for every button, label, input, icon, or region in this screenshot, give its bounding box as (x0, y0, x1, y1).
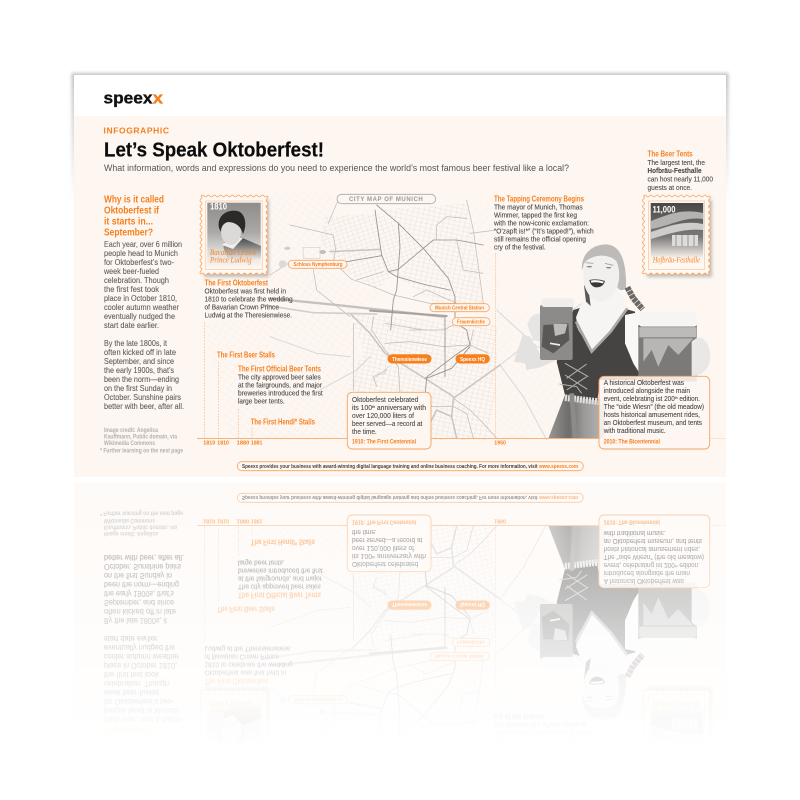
left column body: cooler autumn weather (104, 302, 179, 312)
timeline (197, 253, 726, 446)
map label: Frauenkirche: Frauenkirche (457, 320, 485, 326)
map label: Schloss Nymphenburg (288, 260, 347, 268)
timeline years: 1950 (494, 440, 506, 446)
left column body: the first fest took (104, 284, 160, 294)
braid (627, 287, 643, 309)
callout box: The First Centennial: th (372, 404, 375, 409)
callout: The Beer Tents: Hofbräu-Festhalle (648, 166, 702, 175)
right hand (692, 338, 710, 376)
map label: Theresienwiese (388, 355, 431, 363)
callout: The First Oktoberfest: 1810 to celebrate the wedding (204, 294, 293, 303)
callout box: The Bicentennial: an Oktoberfest museum, and tents (604, 418, 702, 427)
callout box: The First Centennial: anniversary with (375, 403, 426, 412)
belt (565, 398, 607, 403)
callout: The First Oktoberfest: The First Oktoberfest (204, 278, 268, 287)
callout: The Tapping Ceremony Begins: The mayor of Munich, Thomas (494, 203, 583, 212)
callout: The Tapping Ceremony Begins (493, 195, 594, 252)
left sleeve (514, 335, 557, 370)
left column heading: it starts in... (104, 216, 153, 228)
portrait (219, 211, 261, 267)
left column heading: Oktoberfest if (104, 205, 159, 217)
callout: The First Official Beer Tents (238, 365, 323, 406)
title: Let’s Speak Oktoberfest! (104, 140, 324, 162)
callout box: The First Centennial: beer served—a record at (352, 419, 423, 428)
callout box: The Bicentennial: 2010: The Bicentennial (604, 440, 660, 446)
left column body: start date earlier. (104, 320, 159, 330)
callout box: The Bicentennial: with traditional music. (603, 426, 666, 435)
map label: Schloss Nymphenburg: Schloss Nymphenburg (294, 262, 342, 268)
page shadow (72, 73, 728, 203)
eyebrow: INFOGRAPHIC (104, 126, 169, 136)
callout: The Tapping Ceremony Begins: Wimmer, tapped the first keg (494, 211, 577, 220)
skirt (548, 395, 607, 438)
footer note: www.speexx.com (538, 464, 578, 470)
stamp: Bavarian Crown Prince Ludwig: 1810 (210, 202, 227, 212)
callout: The Tapping Ceremony Begins: with the now-iconic exclamation: (493, 219, 589, 228)
left column body: people head to Munich (104, 248, 178, 258)
timeline years: 1810 (217, 440, 229, 446)
left column body: for Oktoberfest’s two- (104, 257, 174, 267)
callout: The Beer Tents (648, 150, 713, 192)
callout: The Beer Tents: can host nearly 11,000 (648, 175, 713, 184)
stamp: Hofbräu-Festhalle (642, 195, 712, 277)
callout: The Tapping Ceremony Begins: cry of the festival. (494, 243, 546, 252)
callout: The First Oktoberfest: Ludwig at the Theresienwiese. (204, 310, 292, 319)
image credit (100, 428, 184, 454)
left column heading: Why is it called (104, 194, 164, 206)
image credit: * Further learning on the next page (100, 448, 184, 454)
image credit: Kauffmann, Public domain, via (104, 434, 178, 440)
timeline years: 1881 (251, 440, 262, 446)
left column body: the early 1900s, that’s (104, 365, 174, 375)
callout box: The First Centennial: its 100 (352, 403, 374, 412)
mirrored reflection of the page (100, 492, 726, 728)
callout: The First Beer Stalls: The First Beer Stalls (217, 351, 275, 360)
left column body: been the norm—ending (104, 374, 179, 384)
left column body: often kicked off in late (104, 347, 176, 357)
callout box: The Bicentennial: edition. (678, 394, 700, 403)
stamp: Bavarian Crown Prince Ludwig: Prince Ludwig (209, 256, 252, 265)
map label: Munich Central Station (430, 304, 489, 312)
callout: The Beer Tents: The largest tent, the (648, 158, 705, 167)
callout box: The First Centennial: 1910: The First Centennial (352, 440, 416, 446)
callout box: The Bicentennial: event, celebrating ist 200 (604, 394, 688, 403)
callout: The First Official Beer Tents: The city approved beer sales (238, 373, 321, 382)
face (583, 256, 619, 301)
callout box: The First Centennial: the time. (352, 427, 377, 436)
header band (74, 75, 726, 116)
callout box: The Bicentennial: hosts historical amusement rides, (604, 410, 700, 419)
map label: Theresienwiese: Theresienwiese (392, 357, 427, 363)
mouth (589, 279, 605, 287)
logo: speex (104, 88, 153, 107)
city map (203, 193, 603, 440)
timeline years (203, 440, 506, 446)
stamp: Hofbräu-Festhalle: 11,000 (652, 204, 676, 216)
callout: The Tapping Ceremony Begins: still remains the official opening (494, 235, 586, 244)
callout: The First Official Beer Tents: at the fairgrounds, and major (238, 381, 322, 390)
callout: The First Official Beer Tents: The First Official Beer Tents (238, 365, 321, 374)
map label: Speexx HQ (456, 355, 489, 363)
left hand (527, 313, 548, 343)
left column heading: September? (104, 226, 153, 238)
left column body: better with beer, after all. (104, 401, 184, 411)
callout box: The Bicentennial: introduced alongside the main (604, 386, 690, 395)
subtitle: What information, words and expressions do you need to experience the world’s most famous beer festival like a local? (104, 163, 569, 174)
left column body: celebration. Though (104, 275, 169, 285)
image credit: Wikimedia Commons (104, 441, 156, 447)
callout box: The Bicentennial (599, 376, 710, 449)
callout box: The First Centennial: Oktoberfest celebrated (352, 395, 418, 404)
lacing (559, 363, 588, 393)
callout: The Tapping Ceremony Begins: “O’zapft is!*” (“It’s tapped!”), which (494, 227, 594, 236)
callout: The Tapping Ceremony Begins: The Tapping Ceremony Begins (494, 195, 584, 204)
callout: The Beer Tents: The Beer Tents (648, 150, 693, 158)
left column body: place in October 1810, (104, 293, 177, 303)
map label: Frauenkirche (452, 318, 490, 326)
lower page content (100, 193, 726, 471)
callout: The Beer Tents: guests at once. (648, 183, 692, 192)
image credit: Image credit: Angelica (104, 428, 159, 434)
callout: The First Oktoberfest: Oktoberfest was first held in (204, 286, 286, 295)
callout: The First Oktoberfest (204, 278, 293, 319)
logo: x (153, 88, 164, 107)
left column body (103, 239, 184, 411)
callout box: The Bicentennial: th (675, 395, 678, 400)
right mug (638, 312, 697, 382)
intro heading (104, 126, 569, 174)
left column (100, 194, 184, 454)
left column body: on the first Sunday in (104, 383, 172, 393)
callout: The First Hendl Stalls: The First Hendl* Stalls (251, 418, 315, 427)
callout box: The First Centennial (347, 392, 431, 449)
tent photo (651, 211, 703, 246)
callout box: The Bicentennial: A historical Oktoberfest was (604, 378, 684, 387)
hair (582, 245, 626, 290)
callout box: The First Centennial: over 120,000 liters of (352, 411, 415, 420)
left column body: October. Sunshine pairs (104, 392, 181, 402)
stamp: Hofbräu-Festhalle: Hofbräu-Festhalle (652, 256, 700, 265)
timeline years: 1880 (237, 440, 249, 446)
chest (576, 288, 627, 351)
right sleeve (625, 312, 642, 375)
left column body: By the late 1800s, it (104, 338, 168, 348)
map label: Speexx HQ: Speexx HQ (460, 357, 485, 363)
left column body: Each year, over 6 million (104, 239, 182, 249)
stamp: Bavarian Crown Prince Ludwig: Bavarian Crown (210, 248, 256, 257)
left mug (540, 298, 574, 360)
callout: The First Official Beer Tents: large beer tents. (238, 397, 285, 406)
bodice (557, 307, 640, 401)
left column body: September, and since (104, 356, 174, 366)
stamp: Bavarian Crown Prince Ludwig (200, 195, 269, 277)
callout: The First Official Beer Tents: breweries introduced the first (238, 389, 323, 398)
footer note: Speexx provides your business with award-winning digital language training and online business coaching. For more information, visit (242, 464, 538, 470)
map label: Munich Central Station: Munich Central Station (435, 306, 484, 312)
left column body: eventually nudged the (104, 311, 175, 321)
map title pill (337, 194, 436, 204)
left column heading (104, 194, 164, 238)
page background (74, 75, 726, 477)
timeline years: 1810 (203, 440, 215, 446)
left column body: week beer-fueled (103, 266, 159, 276)
footer note (237, 462, 583, 471)
map title pill: CITY MAP OF MUNICH (349, 197, 423, 203)
callout box: The Bicentennial: The “oide Wiesn” (the old meadow) (604, 402, 704, 411)
callout: The First Oktoberfest: of Bavarian Crown Prince (204, 302, 279, 311)
illustration: woman with beer mugs (514, 245, 710, 438)
